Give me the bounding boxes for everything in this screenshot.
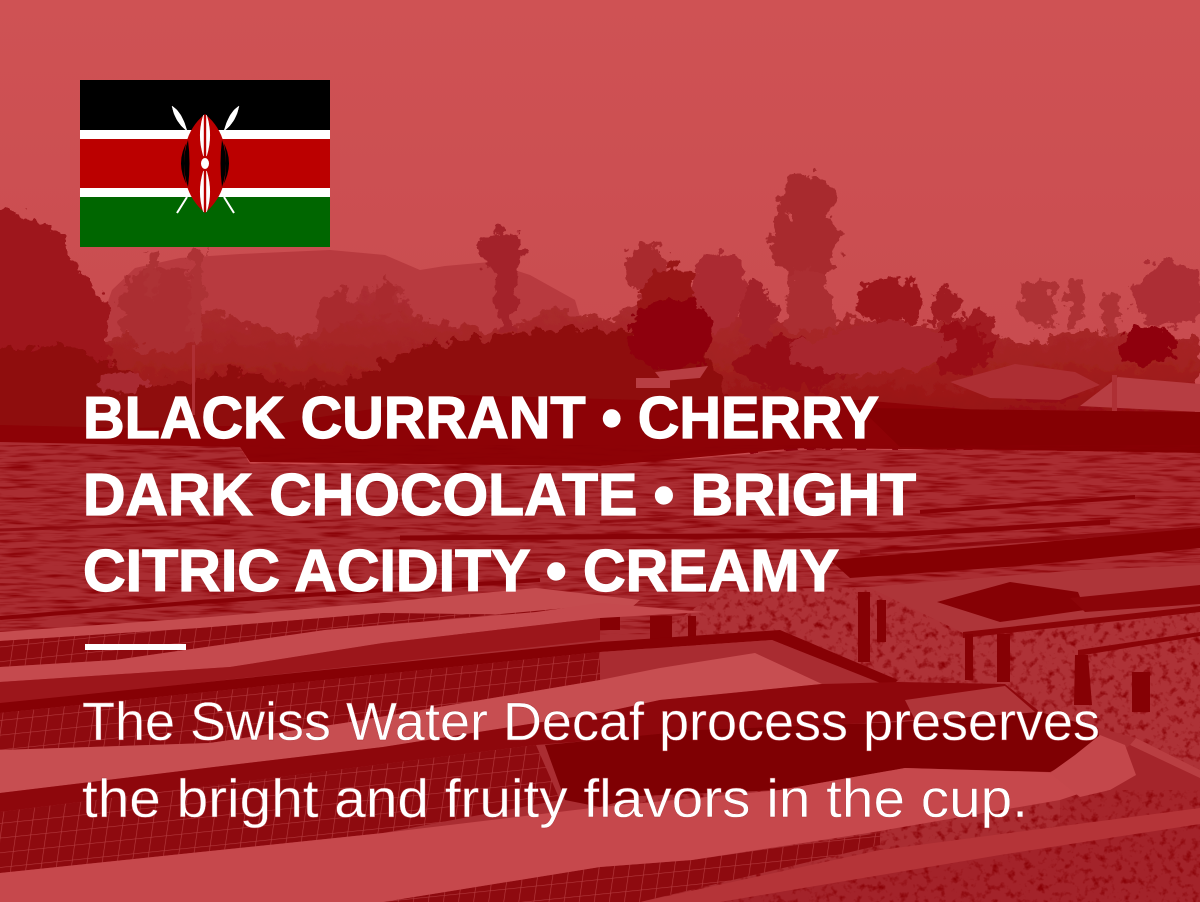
table legs xyxy=(600,592,1150,712)
mesh 2 xyxy=(0,652,600,750)
green stripe xyxy=(80,197,330,247)
right ground xyxy=(650,570,1200,770)
heading line 2: DARK CHOCOLATE • BRIGHT xyxy=(83,462,916,528)
divider rule xyxy=(85,644,186,650)
near rail xyxy=(640,808,1200,902)
ground speckle xyxy=(676,588,1200,762)
ground blotches xyxy=(640,790,1200,902)
right grass xyxy=(1060,745,1200,830)
icon: Maasai shield xyxy=(181,114,229,213)
cloth 1 xyxy=(0,588,640,641)
table 3 bed xyxy=(600,640,888,710)
sky xyxy=(0,0,1200,460)
dark coffee patch xyxy=(545,712,1100,807)
body line 2: the bright and fruity flavors in the cup. xyxy=(82,769,1028,829)
Kenyan flag xyxy=(80,80,330,247)
body line 1: The Swiss Water Decaf process preserves xyxy=(82,692,1100,752)
textured band under cloth 2 xyxy=(0,618,600,704)
hazy houses and roofs xyxy=(950,364,1100,400)
tall tree xyxy=(780,174,836,222)
right rail xyxy=(1130,738,1200,780)
frame 3 xyxy=(0,682,1040,812)
tree cluster xyxy=(623,244,667,292)
body text xyxy=(82,692,1100,829)
cloth 3 xyxy=(0,653,822,793)
right table rail xyxy=(963,606,1200,638)
upper white stripe xyxy=(80,130,330,139)
right trees xyxy=(856,276,924,324)
lower white stripe xyxy=(80,188,330,197)
mid-tone tree band xyxy=(0,285,1200,450)
cloth 2 xyxy=(0,603,705,682)
dark table wedge xyxy=(830,528,1200,578)
dark foreground foliage xyxy=(0,299,1175,440)
mesh 3 xyxy=(0,745,560,873)
far drying tables xyxy=(0,497,1200,618)
bottom ground xyxy=(640,820,1200,902)
field xyxy=(0,442,1200,902)
red stripe xyxy=(80,139,330,188)
band under cloth 1 xyxy=(0,605,622,667)
coffee square xyxy=(937,582,1085,622)
tree at centre-left xyxy=(477,228,523,272)
left tree mass xyxy=(0,205,110,430)
right table top xyxy=(868,565,1200,633)
palm fronds xyxy=(790,320,955,375)
field streak texture xyxy=(0,445,1200,635)
heading line 3: CITRIC ACIDITY • CREAMY xyxy=(83,538,839,604)
thin hazy trees xyxy=(118,268,202,352)
hedge row xyxy=(0,395,1200,466)
rail 2 xyxy=(0,630,898,713)
black stripe xyxy=(80,80,330,130)
mesh 4 xyxy=(383,833,880,902)
cloth wad xyxy=(1050,735,1136,797)
pole xyxy=(1112,375,1117,480)
heading: flavor notes xyxy=(83,385,916,604)
cloth 4 xyxy=(0,768,1136,902)
treeline xyxy=(0,174,1200,450)
icon: crossed spears xyxy=(172,106,239,213)
cloth lump at frame end xyxy=(905,686,1035,722)
heading line 1: BLACK CURRANT • CHERRY xyxy=(83,385,879,451)
distant mountain xyxy=(105,250,590,350)
